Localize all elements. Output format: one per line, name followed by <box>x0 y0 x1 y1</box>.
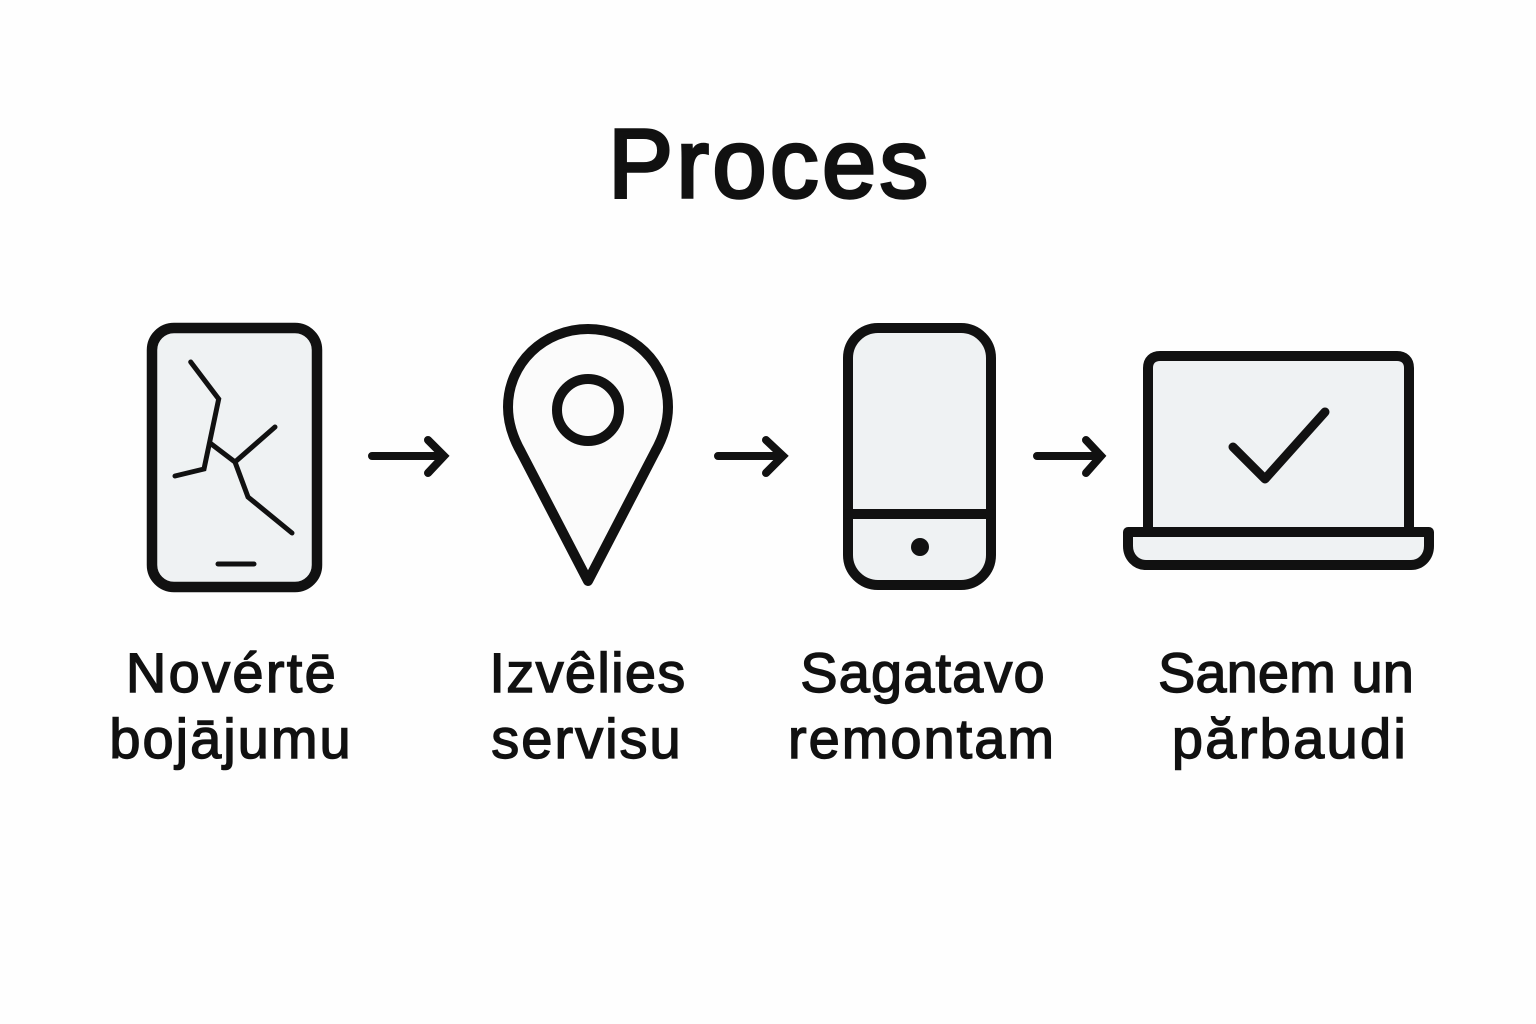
label: step 4: părbaudi <box>1172 707 1408 770</box>
icon: phone ready for repair <box>848 328 991 585</box>
label: step 1: bojājumu <box>109 707 353 770</box>
label: step 3 <box>788 641 1056 770</box>
label: step 3: remontam <box>788 707 1056 770</box>
label: step 1: Novértē <box>126 641 338 704</box>
label: step 3: Sagatavo <box>800 641 1046 704</box>
label: step 2: servisu <box>491 707 683 770</box>
arrow 1 <box>372 440 444 473</box>
icon: location pin <box>508 329 668 581</box>
title: Proces <box>608 109 932 218</box>
arrow 2 <box>718 440 783 473</box>
label: step 1 <box>109 641 353 770</box>
arrow 3 <box>1037 440 1101 473</box>
label: step 4 <box>1158 641 1414 770</box>
icon: laptop with check mark <box>1128 356 1429 565</box>
label: step 4: Sanem un <box>1158 641 1414 704</box>
label: step 2: Izvêlies <box>489 641 687 704</box>
label: step 2 <box>489 641 687 770</box>
icon: cracked phone <box>152 328 317 587</box>
